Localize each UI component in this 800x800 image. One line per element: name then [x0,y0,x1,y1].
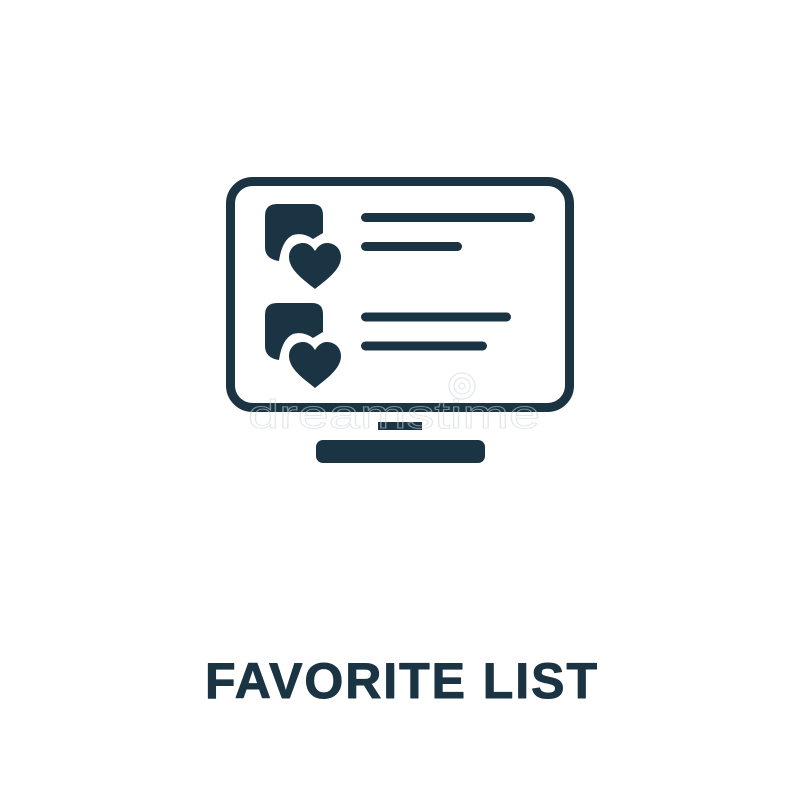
text line short [361,242,462,251]
icon: heart [289,342,341,388]
monitor neck [378,422,422,430]
icon: computer monitor with favorite list [230,182,570,463]
title: FAVORITE LIST [205,653,597,709]
text line short [361,342,487,350]
monitor screen frame [230,182,570,408]
monitor base [316,440,485,463]
watermark [248,373,540,437]
list item 2 [265,303,511,388]
watermark text: dreamstime [248,393,540,437]
icon: image placeholder square [265,303,323,360]
text line long [361,213,535,222]
icon: image placeholder square [265,204,323,261]
icon: heart [289,243,341,289]
list item 1 [265,204,535,289]
text line long [361,312,511,322]
watermark spiral [449,373,475,399]
